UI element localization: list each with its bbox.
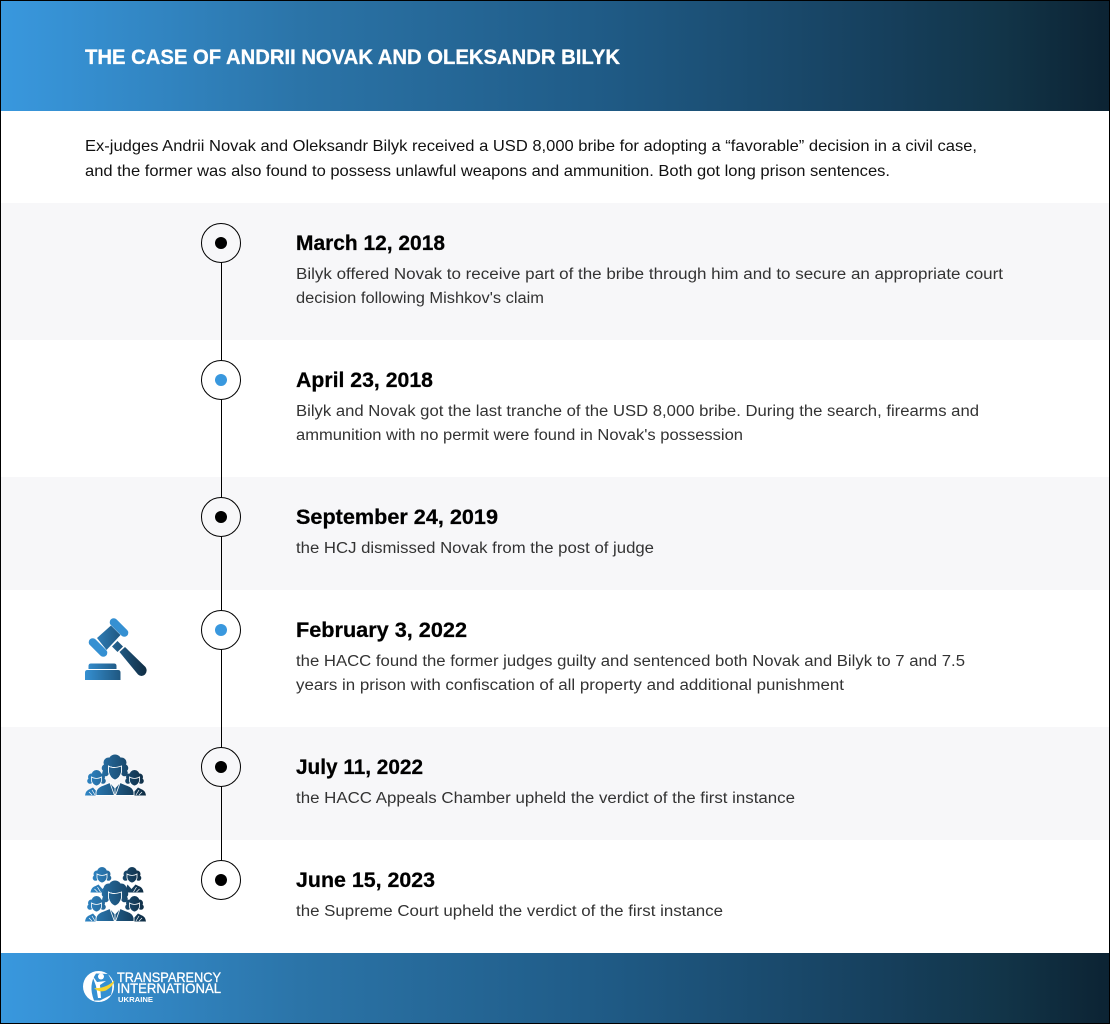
logo: Transparency International Ukraine: [83, 969, 222, 1004]
event: April 23, 2018: Bilyk and Novak got the last tranche of the USD 8,000 bribe. During the search, firearms and: [296, 403, 979, 420]
icon: panel of five judges: [85, 867, 146, 922]
icon: gavel: [85, 617, 147, 680]
event: June 15, 2023: June 15, 2023: [296, 869, 435, 892]
intro text: Ex-judges Andrii Novak and Oleksandr Bilyk received a USD 8,000 bribe for adopting a “favorable” decision in a civil case,: [85, 138, 977, 155]
logo emblem: [83, 971, 114, 1002]
event: February 3, 2022: the HACC found the former judges guilty and sentenced both Novak and Bilyk to 7 and 7.5: [296, 653, 965, 670]
event: March 12, 2018: [296, 232, 1004, 307]
event: April 23, 2018: [296, 369, 979, 444]
logo: Transparency International Ukraine: INTERNATIONAL: [117, 980, 221, 996]
timeline marker: February 3, 2022: [202, 610, 240, 650]
event: March 12, 2018: decision following Mishkov's claim: [296, 290, 544, 307]
event: March 12, 2018: Bilyk offered Novak to receive part of the bribe through him and to secure an appropriate court: [296, 266, 1004, 283]
event: April 23, 2018: ammunition with no permit were found in Novak's possession: [296, 427, 743, 444]
event: February 3, 2022: February 3, 2022: [296, 619, 467, 642]
timeline marker: July 11, 2022: [202, 748, 240, 786]
logo: Transparency International Ukraine: UKRAINE: [118, 997, 153, 1004]
header band: [1, 1, 1109, 111]
icon: panel of three judges: [85, 754, 146, 796]
event: March 12, 2018: March 12, 2018: [296, 232, 445, 255]
event: September 24, 2019: September 24, 2019: [296, 506, 498, 529]
row backgrounds: [1, 203, 1109, 840]
intro text: and the former was also found to possess unlawful weapons and ammunition. Both got long prison sentences.: [85, 163, 890, 180]
timeline marker: April 23, 2018: [202, 360, 240, 400]
timeline marker: June 15, 2023: [202, 860, 240, 900]
event: June 15, 2023: [296, 869, 723, 920]
event: July 11, 2022: [296, 756, 795, 807]
event: July 11, 2022: the HACC Appeals Chamber upheld the verdict of the first instance: [296, 790, 795, 807]
event: April 23, 2018: April 23, 2018: [296, 369, 433, 392]
title: THE CASE OF ANDRII NOVAK AND OLEKSANDR BILYK: [85, 46, 620, 69]
timeline line: [220, 243, 222, 880]
event: September 24, 2019: the HCJ dismissed Novak from the post of judge: [296, 540, 654, 557]
intro text: [85, 138, 977, 180]
event: July 11, 2022: July 11, 2022: [296, 756, 423, 779]
timeline marker: March 12, 2018: [202, 224, 240, 262]
event: February 3, 2022: years in prison with confiscation of all property and additional punishment: [296, 677, 845, 694]
event: June 15, 2023: the Supreme Court upheld the verdict of the first instance: [296, 903, 723, 920]
event: September 24, 2019: [296, 506, 654, 557]
timeline marker: September 24, 2019: [202, 498, 240, 536]
logo: Transparency International Ukraine: TRANSPARENCY: [117, 969, 222, 985]
event: February 3, 2022: [296, 619, 965, 694]
footer band: [1, 953, 1109, 1023]
